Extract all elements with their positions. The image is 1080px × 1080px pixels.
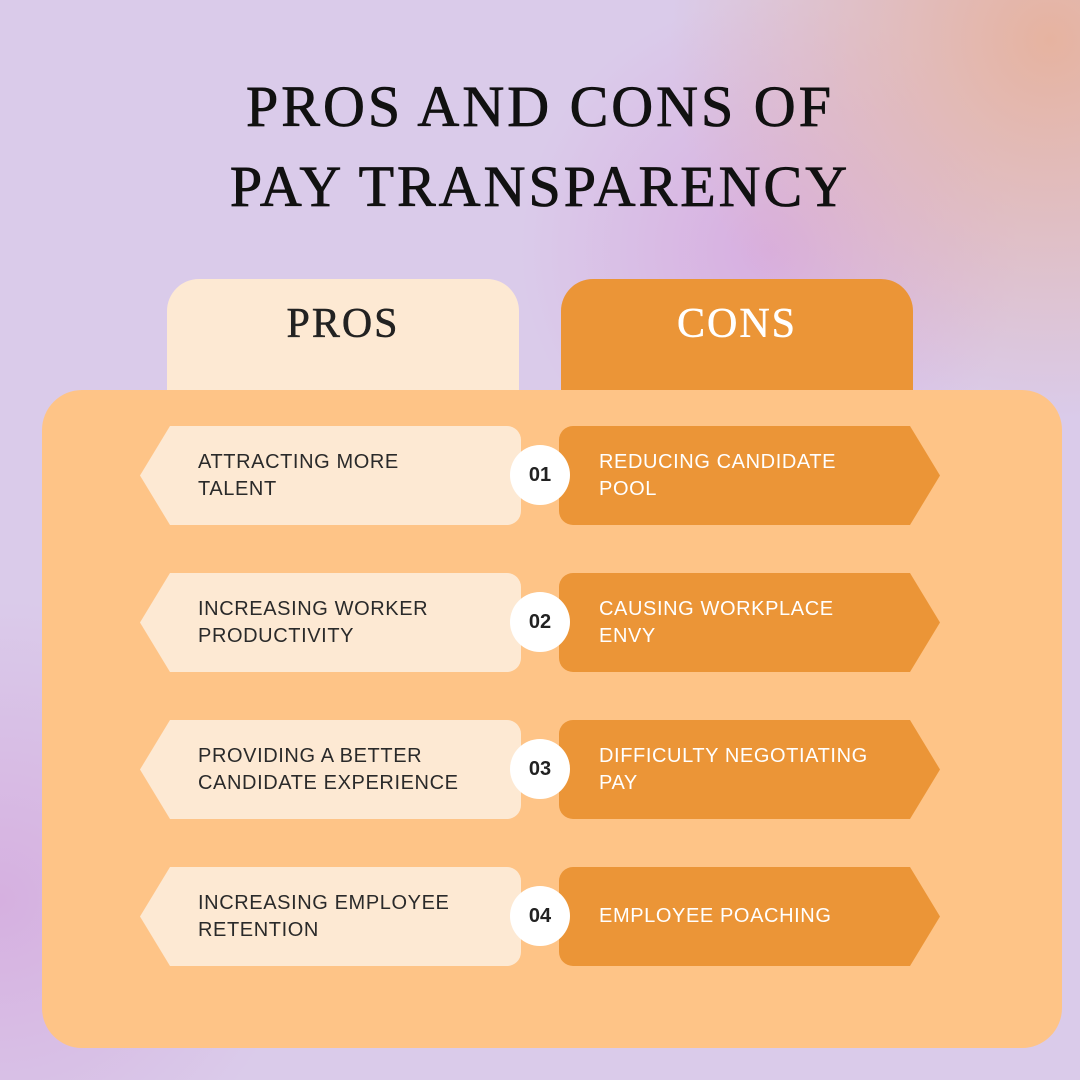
number 03: 03 xyxy=(529,758,551,780)
con 1 xyxy=(559,426,940,525)
con 2 xyxy=(559,573,940,672)
con 2: CAUSING WORKPLACE xyxy=(599,598,834,620)
pro 4: RETENTION xyxy=(198,918,319,940)
pro 4 xyxy=(140,867,521,966)
title xyxy=(230,74,850,219)
con 4: EMPLOYEE POACHING xyxy=(599,905,831,927)
con 1: POOL xyxy=(599,478,657,500)
pro 2: INCREASING WORKER xyxy=(198,598,428,620)
tab: cons xyxy=(561,279,913,399)
con 2: ENVY xyxy=(599,624,656,646)
tab: pros: PROS xyxy=(286,301,400,347)
pro 1: TALENT xyxy=(198,478,277,500)
con 3 xyxy=(559,720,940,819)
tab: cons: CONS xyxy=(677,301,797,347)
con 4 xyxy=(559,867,940,966)
title: PROS AND CONS OF xyxy=(246,74,834,139)
number 01: 01 xyxy=(529,464,551,486)
pro 2: PRODUCTIVITY xyxy=(198,624,354,646)
number 03 xyxy=(510,739,570,799)
pro 3: CANDIDATE EXPERIENCE xyxy=(198,772,459,794)
pro 1: ATTRACTING MORE xyxy=(198,450,399,472)
pro 1 xyxy=(140,426,521,525)
pro 3: PROVIDING A BETTER xyxy=(198,744,422,766)
number 04 xyxy=(510,886,570,946)
title: PAY TRANSPARENCY xyxy=(230,154,850,219)
con 3: PAY xyxy=(599,772,638,794)
number 02: 02 xyxy=(529,611,551,633)
pro 2 xyxy=(140,573,521,672)
number 02 xyxy=(510,592,570,652)
pro 4: INCREASING EMPLOYEE xyxy=(198,892,449,914)
pro 3 xyxy=(140,720,521,819)
panel: main xyxy=(42,390,1062,1048)
con 3: DIFFICULTY NEGOTIATING xyxy=(599,744,868,766)
number 04: 04 xyxy=(529,905,551,927)
number 01 xyxy=(510,445,570,505)
con 1: REDUCING CANDIDATE xyxy=(599,450,836,472)
tab: pros xyxy=(167,279,519,399)
